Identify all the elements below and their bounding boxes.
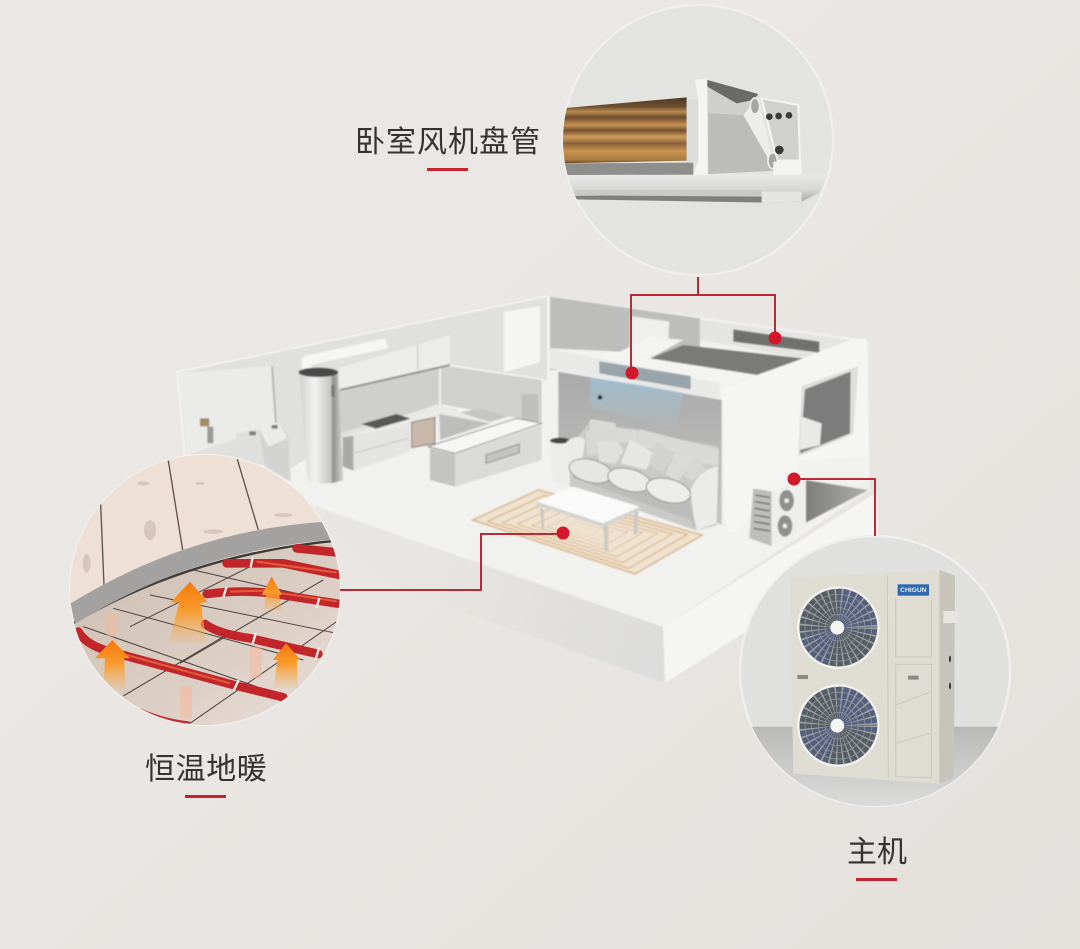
lower drain pan xyxy=(564,163,693,175)
small labels xyxy=(797,675,919,680)
concrete band xyxy=(71,522,333,624)
left arm xyxy=(567,437,585,477)
arrow: heat 2 xyxy=(95,640,130,690)
kitchen xyxy=(200,335,543,487)
oven xyxy=(412,417,435,448)
bottom rail xyxy=(568,174,828,203)
right arm xyxy=(691,467,718,531)
studio floor xyxy=(730,727,1023,813)
slab left face xyxy=(317,507,665,683)
label: bedroom fan coil: 卧室风机盘管 xyxy=(355,126,541,159)
wood floor planks xyxy=(70,455,330,624)
arrow: heat 4 xyxy=(273,643,301,688)
beam front xyxy=(550,348,720,399)
back window xyxy=(630,316,669,347)
tile grid xyxy=(83,563,340,723)
base cabinets xyxy=(343,425,410,471)
kitchen backsplash xyxy=(338,366,440,433)
pipe clips xyxy=(223,557,319,690)
cooktop xyxy=(362,414,411,429)
bedroom fan coil housing xyxy=(700,319,852,358)
counter top xyxy=(343,404,490,437)
top pipe stub xyxy=(750,98,760,114)
marker dots xyxy=(556,332,800,540)
bedroom window xyxy=(798,366,858,457)
seat cushions xyxy=(567,455,615,487)
beam top xyxy=(550,348,757,390)
thermostat xyxy=(598,395,602,400)
right panel lines xyxy=(887,575,932,778)
sofa xyxy=(567,422,718,531)
fan coil fins xyxy=(562,97,687,163)
partition wall xyxy=(440,364,543,423)
yard pit xyxy=(805,480,868,523)
unit side xyxy=(939,570,955,784)
upper cabinets xyxy=(338,335,450,391)
pillows xyxy=(587,432,705,480)
large softener xyxy=(258,422,291,482)
back wall xyxy=(550,297,700,370)
kettle appliance xyxy=(522,394,538,422)
lower pipe stub xyxy=(768,153,777,169)
motor housing xyxy=(708,87,769,164)
sofa body xyxy=(570,422,718,531)
pipe highlights xyxy=(127,562,337,683)
side connector xyxy=(943,611,955,690)
mount base xyxy=(773,162,802,175)
fan bottom xyxy=(798,686,878,766)
red pipes xyxy=(78,548,340,697)
label: main unit: 主机 xyxy=(847,836,907,869)
sink xyxy=(460,408,508,422)
connector lines: fan coils xyxy=(631,277,775,373)
white structural wall xyxy=(722,338,868,532)
left wall xyxy=(177,296,548,470)
arrow: heat 3 xyxy=(262,577,282,612)
brand logo: CHIGUN xyxy=(900,587,927,594)
bottom pipe edge xyxy=(140,709,190,723)
water heater tank xyxy=(298,368,343,483)
living room wall xyxy=(558,372,722,525)
side plate xyxy=(693,78,707,175)
island side xyxy=(430,448,455,487)
circle: bedroom fan coil xyxy=(562,5,833,275)
brand logo xyxy=(898,584,929,596)
side purifier xyxy=(550,438,572,487)
floor xyxy=(185,296,870,627)
rising heat stripes xyxy=(107,613,262,718)
apartment cutaway model xyxy=(177,296,878,683)
island top xyxy=(428,418,542,453)
label: constant temperature floor heating: 恒温地暖 xyxy=(145,753,267,786)
small softener xyxy=(236,429,261,463)
sofa skirt xyxy=(570,463,717,531)
sink recess xyxy=(439,414,490,440)
coil end cap xyxy=(686,98,687,160)
circle: main outdoor unit xyxy=(730,536,1023,813)
slab right face xyxy=(663,492,878,683)
connector line: outdoor unit xyxy=(794,479,875,536)
island front xyxy=(455,425,542,487)
floor heating carpet xyxy=(473,490,702,574)
bedroom grille xyxy=(733,329,819,353)
circle: floor heating xyxy=(63,447,343,733)
wall valve xyxy=(200,418,213,443)
arrow: heat 1 xyxy=(168,582,208,643)
coffee table xyxy=(537,487,640,552)
connector line: floor heating xyxy=(340,534,563,590)
wall panel xyxy=(178,366,276,455)
back cushions xyxy=(592,422,717,463)
outdoor unit miniature xyxy=(749,472,806,546)
control box xyxy=(762,98,800,161)
heated tile layer xyxy=(74,542,340,725)
wall window xyxy=(504,306,540,372)
unit front xyxy=(790,570,939,784)
fan top xyxy=(798,588,878,668)
top arc shade xyxy=(70,540,343,625)
living grille xyxy=(599,361,691,389)
cold air xyxy=(591,377,683,430)
island slot xyxy=(486,444,519,463)
exhaust duct xyxy=(307,343,387,370)
living room and bedroom xyxy=(473,297,868,574)
bedroom ceiling void xyxy=(650,345,803,375)
